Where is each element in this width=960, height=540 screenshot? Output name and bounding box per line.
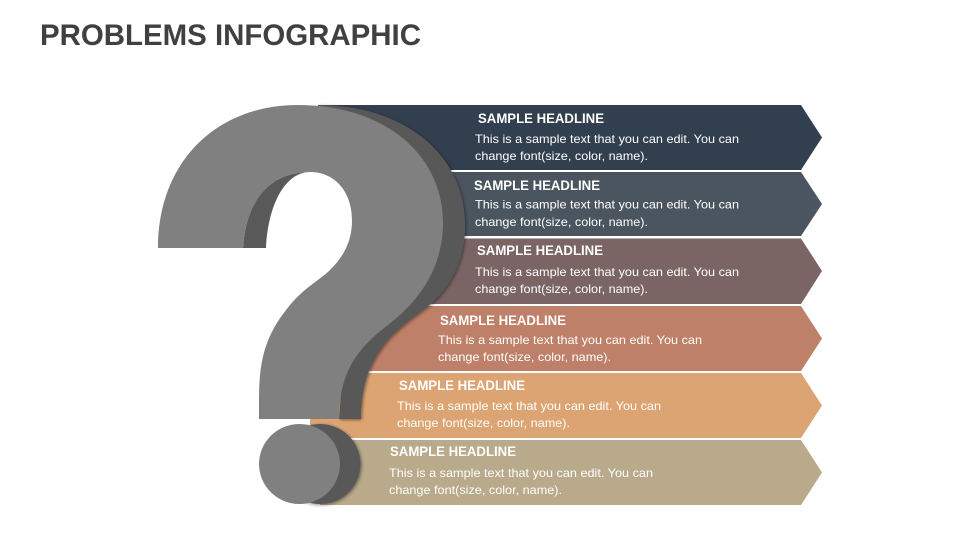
body text 3: change font(size, color, name). bbox=[475, 282, 648, 296]
body text 3: This is a sample text that you can edit. You can bbox=[475, 265, 739, 279]
panel: band 5 bbox=[310, 373, 822, 438]
headline 3: SAMPLE HEADLINE bbox=[477, 242, 603, 258]
panel: band 2 bbox=[400, 172, 822, 236]
panel: band 4 bbox=[330, 306, 822, 371]
body text 1: This is a sample text that you can edit. You can bbox=[475, 132, 739, 146]
body text 1: change font(size, color, name). bbox=[475, 149, 648, 163]
question mark hook depth bbox=[318, 105, 465, 419]
question mark dot face bbox=[259, 424, 340, 504]
body text 5: This is a sample text that you can edit. You can bbox=[397, 399, 661, 413]
headline 2: SAMPLE HEADLINE bbox=[474, 177, 600, 193]
body text 6: This is a sample text that you can edit. You can bbox=[389, 466, 653, 480]
headline 1: SAMPLE HEADLINE bbox=[478, 110, 604, 126]
question mark dot depth bbox=[280, 424, 360, 504]
headline 4: SAMPLE HEADLINE bbox=[440, 312, 566, 328]
question mark hook face bbox=[158, 105, 443, 419]
body text 2: This is a sample text that you can edit. You can bbox=[475, 198, 739, 212]
panel: band 1 bbox=[320, 105, 822, 170]
body text 2: change font(size, color, name). bbox=[475, 215, 648, 229]
panel: band 6 bbox=[320, 440, 822, 505]
body text 5: change font(size, color, name). bbox=[397, 416, 570, 430]
headline 5: SAMPLE HEADLINE bbox=[399, 377, 525, 393]
question mark inner depth bbox=[243, 172, 310, 248]
body text 6: change font(size, color, name). bbox=[389, 483, 562, 497]
body text 4: change font(size, color, name). bbox=[438, 350, 611, 364]
panel: band 3 bbox=[380, 238, 822, 304]
body text 4: This is a sample text that you can edit. You can bbox=[438, 333, 702, 347]
headline 6: SAMPLE HEADLINE bbox=[390, 443, 516, 459]
title: PROBLEMS INFOGRAPHIC bbox=[40, 19, 421, 52]
icon: 3D question mark bbox=[158, 105, 465, 504]
